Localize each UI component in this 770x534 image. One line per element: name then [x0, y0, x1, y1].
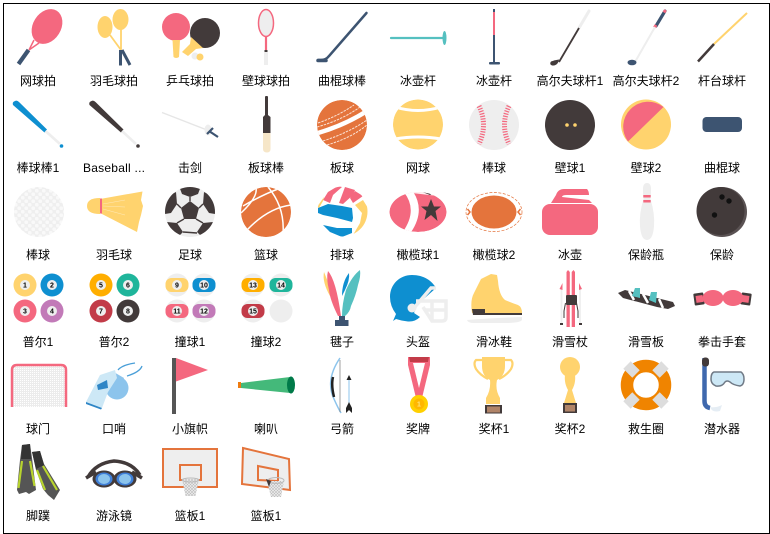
- label: 小旗帜: [172, 421, 208, 436]
- label: 杆台球杆: [698, 73, 746, 88]
- icon: jianzi feather shuttlecock: [324, 270, 360, 326]
- item: ping pong paddles: [162, 13, 220, 88]
- icon: solid balls 1-4: [14, 274, 64, 322]
- item: goal: [12, 365, 66, 436]
- label: 保龄: [710, 248, 734, 262]
- icon: solid balls 1-4: 3: [23, 308, 27, 316]
- label: 篮板1: [251, 508, 282, 523]
- item: volleyball: [317, 186, 368, 262]
- label: 羽毛球拍: [90, 73, 138, 88]
- icon: solid balls 1-4: 2: [50, 282, 54, 290]
- icon: baseball: [469, 100, 519, 150]
- item: baseball: [469, 100, 519, 175]
- item: pool set 2: [90, 274, 140, 349]
- icon: golf ball: [14, 187, 64, 237]
- icon: hockey puck: [702, 117, 742, 132]
- label: 壁球1: [555, 160, 586, 175]
- label: 潜水器: [704, 422, 740, 436]
- item: golf ball: [14, 187, 64, 262]
- icon: shuttlecock: [87, 192, 143, 232]
- icon: blue baseball bat: [13, 101, 63, 148]
- icon: ping pong paddles: [162, 13, 220, 60]
- label: 口哨: [102, 421, 126, 436]
- label: 棒球: [482, 161, 506, 175]
- item: whistle: [86, 363, 142, 436]
- icon: squash ball two colour: [621, 100, 671, 150]
- icon: soccer ball: [164, 186, 216, 238]
- label: Baseball ...: [83, 161, 145, 175]
- item: golf club 1: [537, 11, 604, 88]
- icon: football helmet: [390, 275, 446, 322]
- item: swim fins: [17, 444, 60, 523]
- icon: volleyball: [317, 186, 368, 237]
- item: ice skate: [467, 274, 522, 349]
- item: basketball: [241, 187, 291, 262]
- icon: fencing sword: [162, 112, 218, 137]
- item: pennant flag: [172, 358, 208, 436]
- item: billiard cue: [698, 13, 747, 88]
- label: 棒球: [26, 248, 50, 262]
- item: baseball bat 1: [13, 101, 63, 175]
- icon: golf club dark: [550, 11, 589, 66]
- label: 棒球棒1: [17, 161, 60, 175]
- icon: striped balls 13-15: [242, 274, 292, 322]
- icon: bowling pin: [640, 183, 654, 240]
- icon: cricket bat: [263, 96, 270, 152]
- icon: striped balls 13-15: 15: [249, 308, 257, 316]
- label: 网球: [406, 161, 430, 175]
- icon: solid balls 1-4: 1: [23, 282, 27, 290]
- item: shuttlecock: [87, 192, 143, 262]
- item: life ring: [627, 365, 665, 436]
- icon: striped balls 9-12: 11: [173, 308, 181, 316]
- item: cricket bat: [248, 96, 284, 175]
- item: shuttlecock feather: [324, 270, 360, 349]
- label: 滑冰鞋: [476, 334, 512, 349]
- icon: striped balls 9-12: 10: [200, 282, 208, 290]
- item: helmet: [390, 275, 446, 349]
- icon: basketball: [241, 187, 291, 237]
- item: tennis ball: [393, 100, 443, 175]
- label: 击剑: [178, 160, 202, 175]
- item: pool set 1: [14, 274, 64, 349]
- icon: curling stone: [542, 189, 598, 235]
- item: striped balls 1: [166, 274, 216, 349]
- item: medal: [406, 357, 430, 436]
- icon: striped balls 9-12: [166, 274, 216, 322]
- label: 板球: [330, 161, 354, 175]
- icon: striped balls 9-12: 12: [200, 308, 208, 316]
- icon: curling stick horizontal: [391, 31, 446, 45]
- label: 脚蹼: [26, 508, 50, 523]
- label: 救生圈: [628, 421, 664, 436]
- label: 奖杯2: [555, 422, 586, 436]
- icon: cricket ball: [317, 100, 367, 150]
- label: 喇叭: [254, 421, 278, 436]
- icon: dark baseball bat: [89, 101, 140, 148]
- label: 曲棍球: [704, 161, 740, 175]
- icon: tennis racket: [18, 3, 69, 64]
- item: hockey puck: [702, 117, 742, 175]
- icon: vuvuzela: [238, 376, 295, 394]
- icon: curling stick vertical: [489, 9, 500, 64]
- icon: striped balls 13-15: 13: [249, 282, 257, 290]
- item: boxing gloves: [693, 290, 752, 349]
- label: 冰壶杆: [400, 73, 436, 88]
- item: fencing sword: [162, 112, 218, 175]
- item: swim goggles: [86, 461, 142, 523]
- icon: basketball backboard front view: [163, 449, 217, 496]
- label: 羽毛球: [96, 248, 132, 262]
- label: 撞球1: [175, 334, 206, 349]
- icon: squash ball dark: [545, 100, 595, 150]
- icon: hockey stick: [318, 13, 366, 60]
- item: curling stone: [542, 189, 598, 262]
- item: snowboard: [618, 288, 675, 349]
- label: 板球棒: [248, 161, 284, 175]
- label: 网球拍: [20, 73, 56, 88]
- item: curling broom horizontal: [391, 31, 446, 88]
- icon: boxing gloves: [693, 290, 752, 306]
- item: striped balls 2: [242, 274, 292, 349]
- icon: hockey goal: [12, 365, 66, 407]
- label: 毽子: [330, 335, 354, 349]
- item: squash racket: [242, 10, 290, 88]
- label: 普尔2: [99, 334, 130, 349]
- label: 球门: [26, 421, 50, 436]
- label: 曲棍球棒: [318, 74, 366, 88]
- icon: badminton rackets: [98, 9, 130, 66]
- icon: swim goggles: [86, 461, 142, 488]
- item: rugby ball 1: [390, 189, 447, 262]
- item: backboard front: [163, 449, 217, 523]
- label: 高尔夫球杆1: [537, 73, 604, 88]
- label: 橄榄球1: [397, 247, 440, 262]
- icon: bowling ball: [696, 187, 747, 237]
- icon: solid balls 5-8: 7: [99, 308, 103, 316]
- icon: basketball backboard angled view: [242, 448, 290, 497]
- label: 篮球: [254, 247, 278, 262]
- label: 滑雪板: [628, 335, 664, 349]
- label: 滑雪杖: [552, 334, 588, 349]
- item: bowling ball: [696, 187, 747, 262]
- icon: trophy: [474, 357, 512, 414]
- item: trophy 1: [474, 357, 512, 436]
- icon: solid balls 5-8: 6: [126, 282, 130, 290]
- icon: bow and arrow: [331, 358, 352, 413]
- item: vuvuzela: [238, 376, 295, 436]
- icon: snorkel and mask: [702, 358, 744, 412]
- item: badminton rackets: [90, 9, 138, 88]
- item: soccer ball: [164, 186, 216, 262]
- label: 篮板1: [175, 508, 206, 523]
- label: 奖杯1: [479, 422, 510, 436]
- item: tennis racket: [18, 3, 69, 88]
- icon: solid balls 5-8: 8: [126, 308, 130, 316]
- label: 奖牌: [406, 422, 430, 436]
- icon: swim fins: [17, 444, 60, 500]
- icon: billiard cue: [698, 13, 747, 62]
- label: 冰壶: [558, 247, 582, 262]
- label: 普尔1: [23, 334, 54, 349]
- icon: globe trophy: [560, 357, 580, 413]
- label: 橄榄球2: [473, 247, 516, 262]
- label: 头盔: [406, 334, 430, 349]
- icon: snowboard: [618, 288, 675, 309]
- item: baseball bat 2: [83, 101, 145, 175]
- label: 冰壶杆: [476, 73, 512, 88]
- icon: rugby ball orange: [466, 192, 522, 232]
- label: 足球: [178, 248, 202, 262]
- icon: rugby ball pink: [390, 192, 446, 232]
- label: 撞球2: [251, 334, 282, 349]
- icon: solid balls 5-8: [90, 274, 140, 322]
- icon: striped balls 13-15: 14: [277, 282, 285, 290]
- item: golf club 2: [613, 10, 680, 88]
- item: snorkel and mask: [702, 358, 744, 436]
- item: trophy 2: [555, 357, 586, 436]
- item: bowling pin: [628, 183, 664, 262]
- item: backboard angled: [242, 448, 290, 523]
- label: 壁球球拍: [242, 73, 290, 88]
- icon: life ring: [627, 365, 665, 405]
- icon: ice skate: [467, 274, 522, 323]
- label: 高尔夫球杆2: [613, 73, 680, 88]
- item: rugby ball 2: [466, 192, 522, 262]
- item: hockey stick: [318, 13, 366, 88]
- label: 保龄瓶: [628, 248, 664, 262]
- label: 弓箭: [330, 421, 354, 436]
- item: skis and poles: [552, 270, 588, 349]
- label: 拳击手套: [698, 334, 746, 349]
- icon: solid balls 5-8: 5: [99, 282, 103, 290]
- item: curling broom vertical: [476, 9, 512, 88]
- label: 游泳镜: [96, 508, 132, 523]
- item: squash ball 1: [545, 100, 595, 175]
- icon: medal: 1: [417, 402, 421, 408]
- icon: solid balls 1-4: 4: [50, 308, 54, 316]
- icon: whistle: [86, 363, 142, 410]
- icon: tennis ball: [393, 100, 443, 150]
- item: cricket ball: [317, 100, 367, 175]
- icon: striped balls 9-12: 9: [175, 282, 179, 290]
- label: 排球: [330, 248, 354, 262]
- label: 壁球2: [631, 160, 662, 175]
- icon: golf club light: [628, 10, 666, 65]
- label: 乒乓球拍: [166, 73, 214, 88]
- icon: skis and poles: [560, 270, 582, 327]
- icon: squash racket: [258, 10, 274, 65]
- item: bow and arrow: [330, 358, 354, 436]
- icon: pennant flag: [172, 358, 208, 414]
- item: squash ball 2: [621, 100, 671, 175]
